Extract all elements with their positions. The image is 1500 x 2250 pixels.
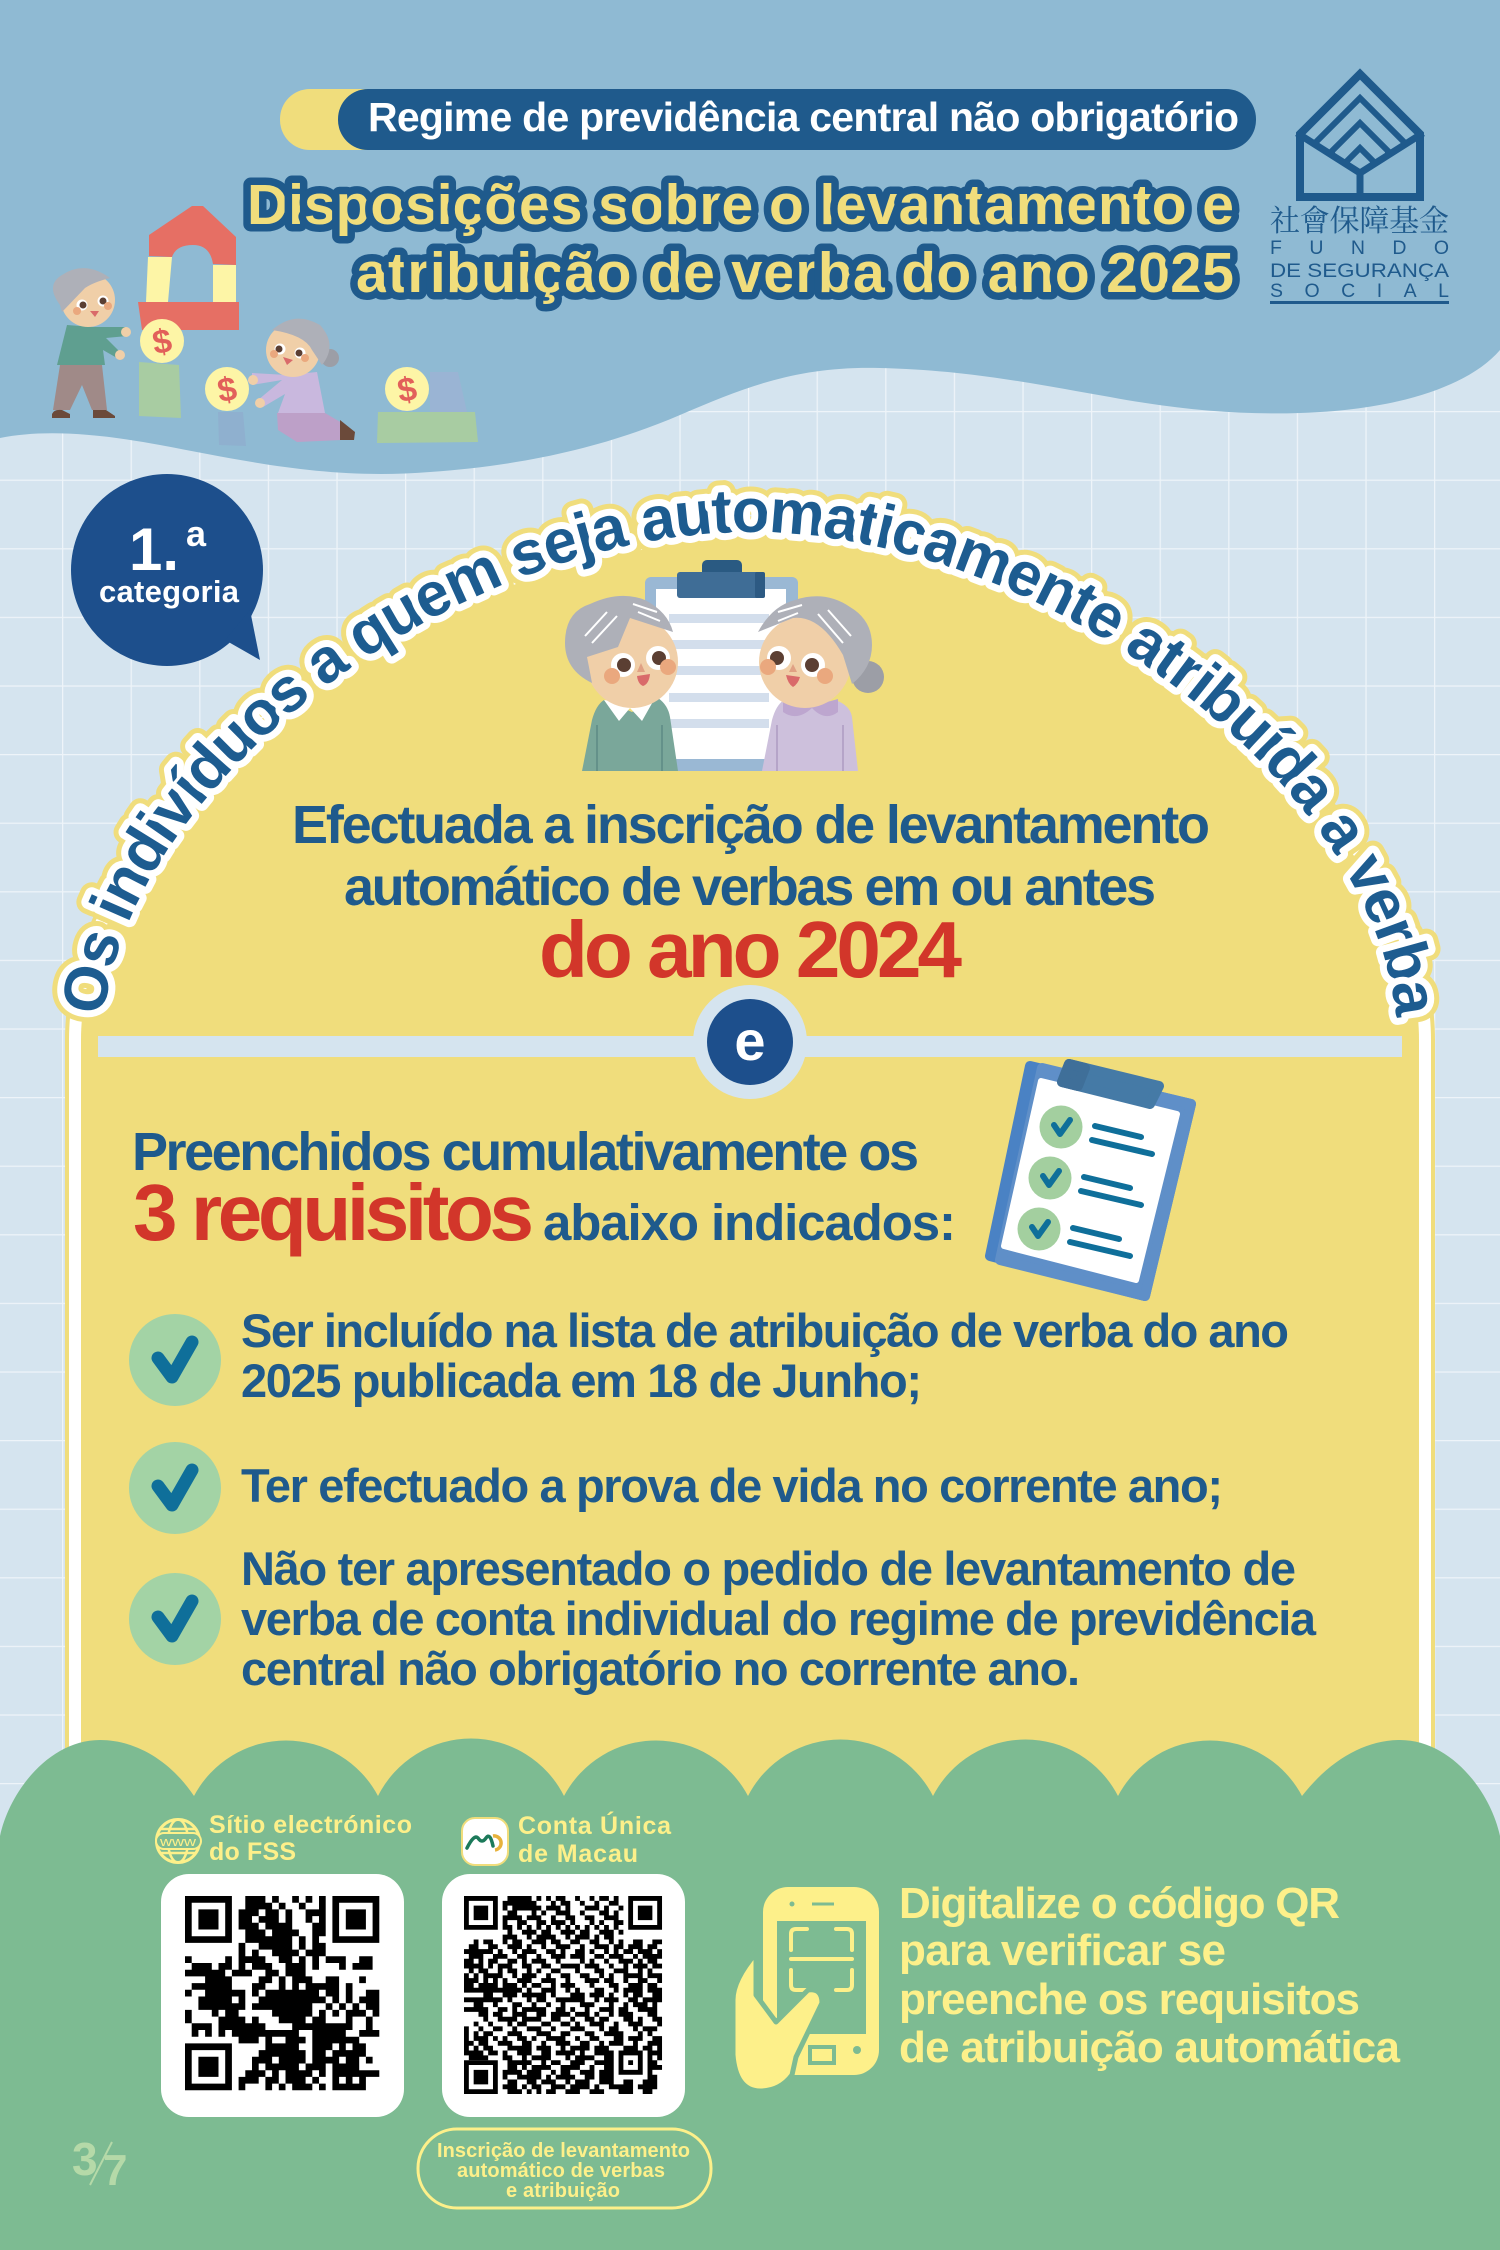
requirements heading: 3 requisitos [133, 1168, 534, 1257]
coins: $ [395, 370, 420, 410]
QR code 2 [464, 1896, 662, 2094]
requirement 1: Ser incluído na lista de atribuição de verba do ano [241, 1304, 1289, 1357]
divider with "e" badge: e [734, 1009, 766, 1072]
icon: globe www: www [159, 1834, 197, 1849]
QR code card: Conta Única [442, 1874, 685, 2117]
Conta Única label: Conta Única [518, 1810, 672, 1840]
requirement 2: Ter efectuado a prova de vida no corrente ano; [241, 1459, 1223, 1512]
requirement 2 [129, 1442, 1223, 1534]
check icon 3 [129, 1573, 221, 1665]
title [247, 173, 1234, 305]
condition 1 text: do ano 2024 [539, 905, 962, 994]
logo: Fundo de Segurança Social [1270, 74, 1449, 304]
title: atribuição de verba do ano 2025 [356, 241, 1234, 305]
QR code 1 [185, 1896, 379, 2090]
QR instruction text [899, 1879, 1401, 2072]
category bubble: a [186, 513, 207, 554]
arch heading curved text: Os indivíduos a quem seja automaticamente atribuída a verba [52, 480, 1441, 1022]
illustration: seniors with blocks and coins [52, 206, 478, 446]
footer scalloped green panel [0, 1739, 1500, 2250]
requirement 3 [129, 1542, 1317, 1695]
category bubble [71, 474, 263, 666]
website label [156, 1811, 412, 1866]
check icon 1 [129, 1314, 221, 1406]
header wave background [0, 0, 1500, 474]
Conta Única label [462, 1810, 672, 1868]
QR instruction text: para verificar se [899, 1926, 1226, 1975]
check icon 2 [129, 1442, 221, 1534]
requirement 3: central não obrigatório no corrente ano. [241, 1642, 1080, 1695]
logo Portuguese name [1270, 237, 1449, 304]
large clipboard [645, 560, 798, 771]
title: Disposições sobre o levantamento e [247, 173, 1234, 237]
icon: checklist clipboard [990, 1064, 1191, 1296]
page number: 7 [103, 2146, 127, 2195]
condition 1 text: automático de verbas em ou antes [344, 857, 1156, 917]
logo emblem [1297, 74, 1423, 197]
category bubble: categoria [99, 574, 240, 609]
caption pill: e atribuição [506, 2180, 620, 2202]
icon: Conta Única app [462, 1818, 508, 1865]
QR instruction text: preenche os requisitos [899, 1975, 1360, 2024]
QR code card: website [161, 1874, 404, 2117]
requirements heading [132, 1122, 956, 1257]
building blocks [138, 206, 478, 446]
coins: $ [215, 370, 240, 410]
subtitle pill [280, 89, 1256, 150]
senior woman [758, 596, 884, 771]
arch heading curved text: Os indivíduos a quem seja automaticamente atribuída a verba [57, 485, 1436, 1025]
icon: globe www [156, 1820, 201, 1862]
QR instruction text: Digitalize o código QR [899, 1879, 1340, 1928]
page number [72, 2133, 127, 2195]
category bubble: 1. [129, 516, 179, 583]
condition 1 text: Efectuada a inscrição de levantamento [292, 795, 1210, 855]
icon: hand holding phone scanning [733, 1887, 879, 2091]
subtitle pill: Regime de previdência central não obrigatório [368, 94, 1239, 140]
website label: Sítio electrónico [209, 1811, 412, 1839]
website label: do FSS [209, 1838, 296, 1866]
senior man building [52, 268, 131, 418]
logo Portuguese name: SOCIAL [1270, 280, 1449, 302]
illustration: senior couple with clipboard [565, 560, 884, 771]
caption pill: automático de verbas [457, 2160, 665, 2182]
divider with "e" badge [98, 985, 1402, 1099]
panel: yellow arch [65, 520, 1435, 1800]
Conta Única label: de Macau [518, 1840, 638, 1868]
QR instruction text: de atribuição automática [899, 2023, 1401, 2072]
page number: 3 [72, 2133, 98, 2185]
senior woman pushing coin [248, 319, 355, 442]
senior man [565, 596, 678, 771]
condition 1 text [292, 795, 1210, 994]
requirements heading: abaixo indicados: [543, 1194, 956, 1251]
requirement 3: verba de conta individual do regime de previdência [241, 1592, 1317, 1645]
requirement 1 [129, 1304, 1289, 1407]
requirement 3: Não ter apresentado o pedido de levantamento de [241, 1542, 1296, 1595]
requirement 1: 2025 publicada em 18 de Junho; [241, 1354, 922, 1407]
coins: $ [150, 322, 175, 362]
caption pill: Inscrição de levantamento [437, 2140, 690, 2162]
caption pill [418, 2129, 711, 2208]
coins [140, 319, 429, 411]
requirements heading: Preenchidos cumulativamente os [132, 1122, 919, 1182]
logo Portuguese name: FUNDO [1270, 237, 1449, 259]
logo Portuguese name: DE SEGURANÇA [1270, 260, 1449, 282]
logo Chinese name: 社會保障基金 [1270, 196, 1449, 240]
